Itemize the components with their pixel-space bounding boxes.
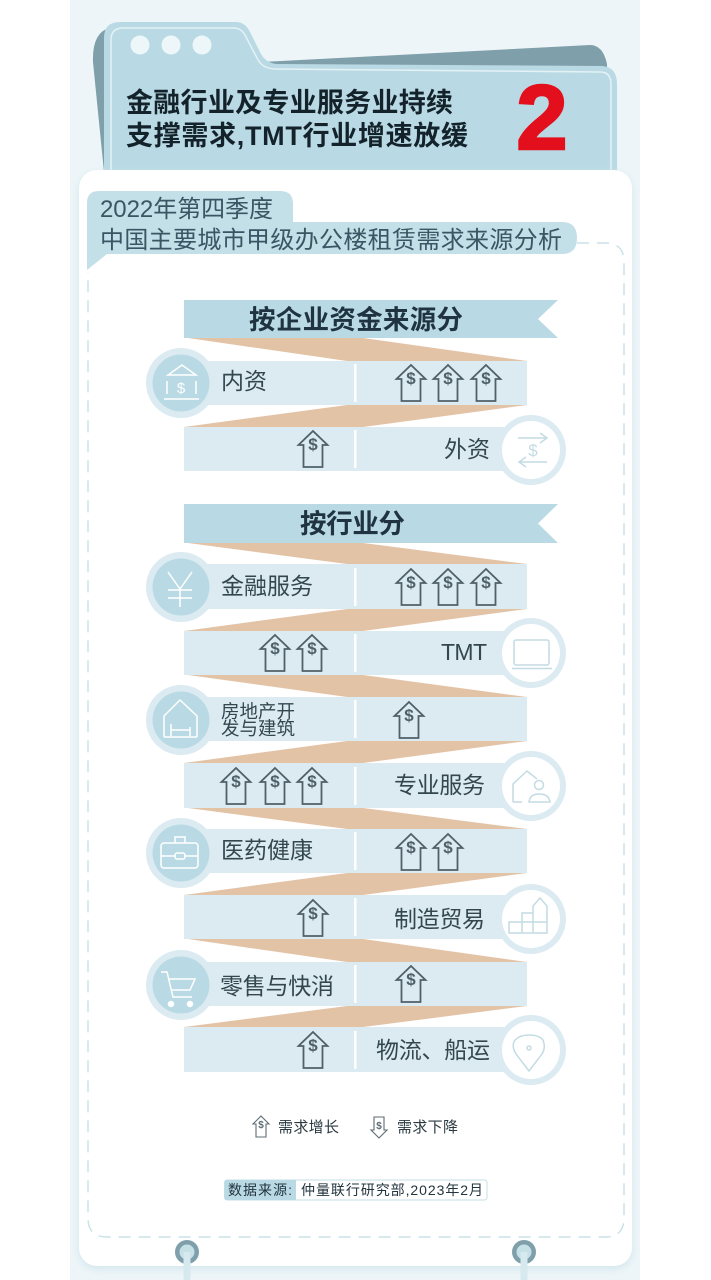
growth arrow (298, 1032, 328, 1068)
row: TMT (184, 618, 566, 688)
label: 金融服务 (221, 573, 313, 599)
growth arrow (298, 431, 328, 467)
growth arrow (298, 900, 328, 936)
row: domestic capital (146, 348, 527, 418)
main card (79, 170, 632, 1266)
window dots (130, 36, 212, 54)
growth arrows (222, 768, 326, 804)
growth arrows (396, 365, 500, 401)
growth arrows: $ (270, 639, 280, 658)
label: 专业服务 (394, 772, 485, 798)
icon: laptop (512, 640, 552, 668)
icon: bank: $ (177, 380, 186, 397)
growth arrows: $ (307, 772, 317, 791)
growth arrows: $ (406, 369, 416, 388)
label: 物流、船运 (376, 1037, 490, 1063)
growth arrow: $ (308, 435, 318, 454)
big number 2: 2 (516, 67, 568, 169)
growth arrows: $ (443, 369, 453, 388)
row: finance (146, 552, 527, 622)
data source: 仲量联行研究部,2023年2月 (301, 1182, 483, 1198)
banner: by industry: 按行业分 (300, 509, 405, 539)
growth arrows (396, 834, 462, 870)
row: real estate and construction (146, 685, 527, 755)
label: 内资 (221, 368, 267, 394)
icon: location pin (513, 1035, 544, 1071)
subtitle tag (87, 191, 577, 270)
dashed frame (88, 243, 624, 1237)
growth arrows (260, 635, 326, 671)
label: 制造贸易 (394, 906, 485, 932)
growth arrow: $ (308, 904, 318, 923)
growth arrows: $ (307, 639, 317, 658)
section 1: by capital source (146, 300, 566, 485)
icon: person and house (513, 771, 550, 802)
label: 房地产开 (221, 701, 295, 722)
growth arrows: $ (231, 772, 241, 791)
folder header (93, 22, 617, 172)
growth arrows: $ (406, 838, 416, 857)
title (126, 88, 468, 151)
growth arrow (396, 966, 426, 1002)
label: 零售与快消 (220, 973, 334, 999)
connector bands (184, 338, 527, 427)
legend: demand down: $ (376, 1121, 382, 1132)
data source (224, 1180, 487, 1200)
label: 医药健康 (221, 837, 313, 863)
growth arrows: $ (443, 573, 453, 592)
row: retail and FMCG (146, 950, 527, 1020)
icon: shopping cart (161, 972, 195, 1006)
icon: bank (164, 365, 199, 399)
row: professional services (184, 751, 566, 821)
subtitle tag: 2022年第四季度 (100, 196, 273, 223)
growth arrows: $ (443, 838, 453, 857)
subtitle tag: 中国主要城市甲级办公楼租赁需求来源分析 (100, 227, 562, 254)
title: 金融行业及专业服务业持续 (126, 88, 453, 118)
data source: 数据来源: (228, 1182, 292, 1198)
section 2: by industry (146, 504, 566, 1085)
legend: demand up (253, 1116, 339, 1137)
legend (253, 1116, 458, 1138)
banner: by industry (184, 504, 558, 543)
growth arrows: $ (481, 573, 491, 592)
icon: stair blocks (509, 898, 547, 933)
growth arrow (394, 702, 424, 738)
title: 支撑需求,TMT行业增速放缓 (126, 121, 468, 151)
legend: demand up: 需求增长 (278, 1119, 339, 1136)
connector bands (184, 543, 527, 1027)
icon: house (164, 700, 197, 737)
row: foreign capital (184, 415, 566, 485)
row: manufacturing and trade (184, 884, 566, 954)
row: logistics and shipping (184, 1015, 566, 1085)
growth arrow: $ (308, 1036, 318, 1055)
growth arrow: $ (404, 706, 414, 725)
growth arrows: $ (481, 369, 491, 388)
legend: demand down (371, 1117, 458, 1138)
banner: by capital source: 按企业资金来源分 (249, 305, 463, 335)
legend: demand down: 需求下降 (397, 1119, 458, 1136)
icon: exchange arrows (518, 433, 547, 467)
binder ring left (175, 1240, 199, 1280)
growth arrows: $ (270, 772, 280, 791)
label: 外资 (444, 436, 490, 462)
icon: yen (168, 572, 192, 607)
banner: by capital source (184, 300, 558, 338)
icon: briefcase (161, 837, 198, 868)
label: 发与建筑 (221, 718, 295, 739)
label (221, 701, 295, 739)
growth arrows: $ (406, 573, 416, 592)
growth arrow: $ (406, 970, 416, 989)
label: TMT (441, 639, 487, 665)
binder ring right (512, 1240, 536, 1280)
row: pharma and health (146, 818, 527, 888)
icon: exchange arrows: $ (528, 441, 538, 460)
growth arrows (396, 569, 500, 605)
legend: demand up: $ (258, 1120, 264, 1131)
